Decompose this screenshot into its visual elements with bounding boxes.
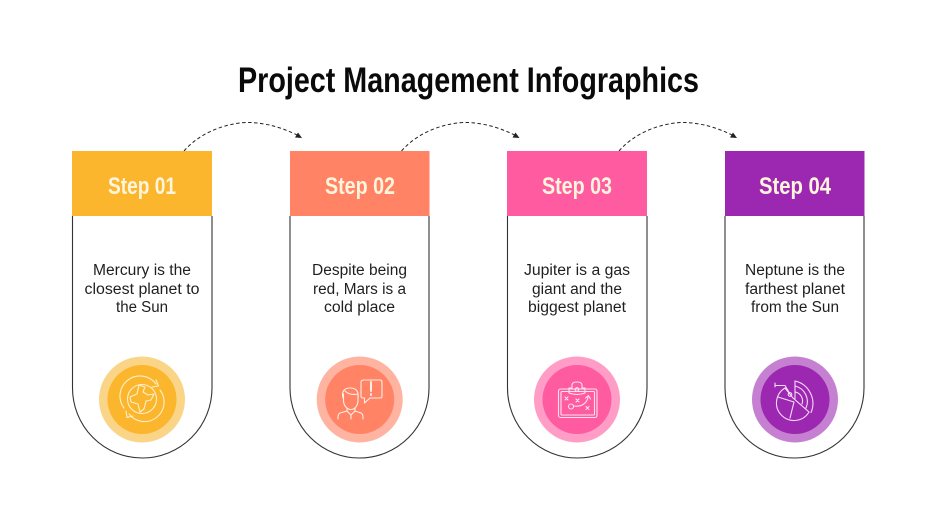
header: step 03: Step 03 (542, 173, 612, 200)
text: step 04 description: farthest planet (745, 281, 846, 298)
header: step 02 (290, 151, 430, 216)
header: step 04: Step 04 (759, 173, 831, 200)
panel outline (72, 216, 212, 458)
text: step 03 description: Jupiter is a gas (524, 262, 630, 279)
arrow: step 3 to step 4 (619, 122, 737, 151)
arrow: step 2 to step 3 (402, 122, 520, 151)
text: step 04 description: Neptune is the (745, 262, 845, 279)
header: step 03 (507, 151, 647, 216)
panel: step 02 (290, 151, 430, 458)
icon: radar (752, 356, 838, 442)
text: step 01 description: Mercury is the (93, 262, 191, 279)
text: step 03 description: giant and the (532, 281, 622, 298)
text: step 04 description: from the Sun (751, 299, 839, 316)
text: step 01 description (84, 262, 200, 316)
icon: person with alert bubble (317, 356, 403, 442)
header: step 01 (72, 151, 212, 216)
panel: step 01 (72, 151, 212, 458)
header: step 01: Step 01 (108, 173, 176, 200)
title: Project Management Infographics (238, 61, 699, 100)
panel outline (508, 216, 647, 458)
panel outline (290, 216, 429, 458)
text: step 02 description: red, Mars is a (313, 281, 406, 298)
text: step 02 description: Despite being (312, 262, 407, 279)
panel: step 03 (507, 151, 647, 458)
text: step 03 description: biggest planet (528, 299, 627, 316)
text: step 02 description: cold place (324, 299, 395, 316)
icon: strategy clipboard (534, 356, 620, 442)
icon: globe with arrows (99, 356, 185, 442)
text: step 03 description (524, 262, 630, 316)
arrow: step 1 to step 2 (184, 122, 302, 151)
text: step 04 description (745, 262, 846, 316)
panel: step 04 (725, 151, 864, 458)
text: step 01 description: closest planet to (84, 281, 200, 298)
text: step 01 description: the Sun (116, 299, 168, 316)
panel outline (725, 216, 864, 458)
header: step 04 (725, 151, 864, 216)
header: step 02: Step 02 (325, 173, 395, 200)
text: step 02 description (312, 262, 407, 316)
